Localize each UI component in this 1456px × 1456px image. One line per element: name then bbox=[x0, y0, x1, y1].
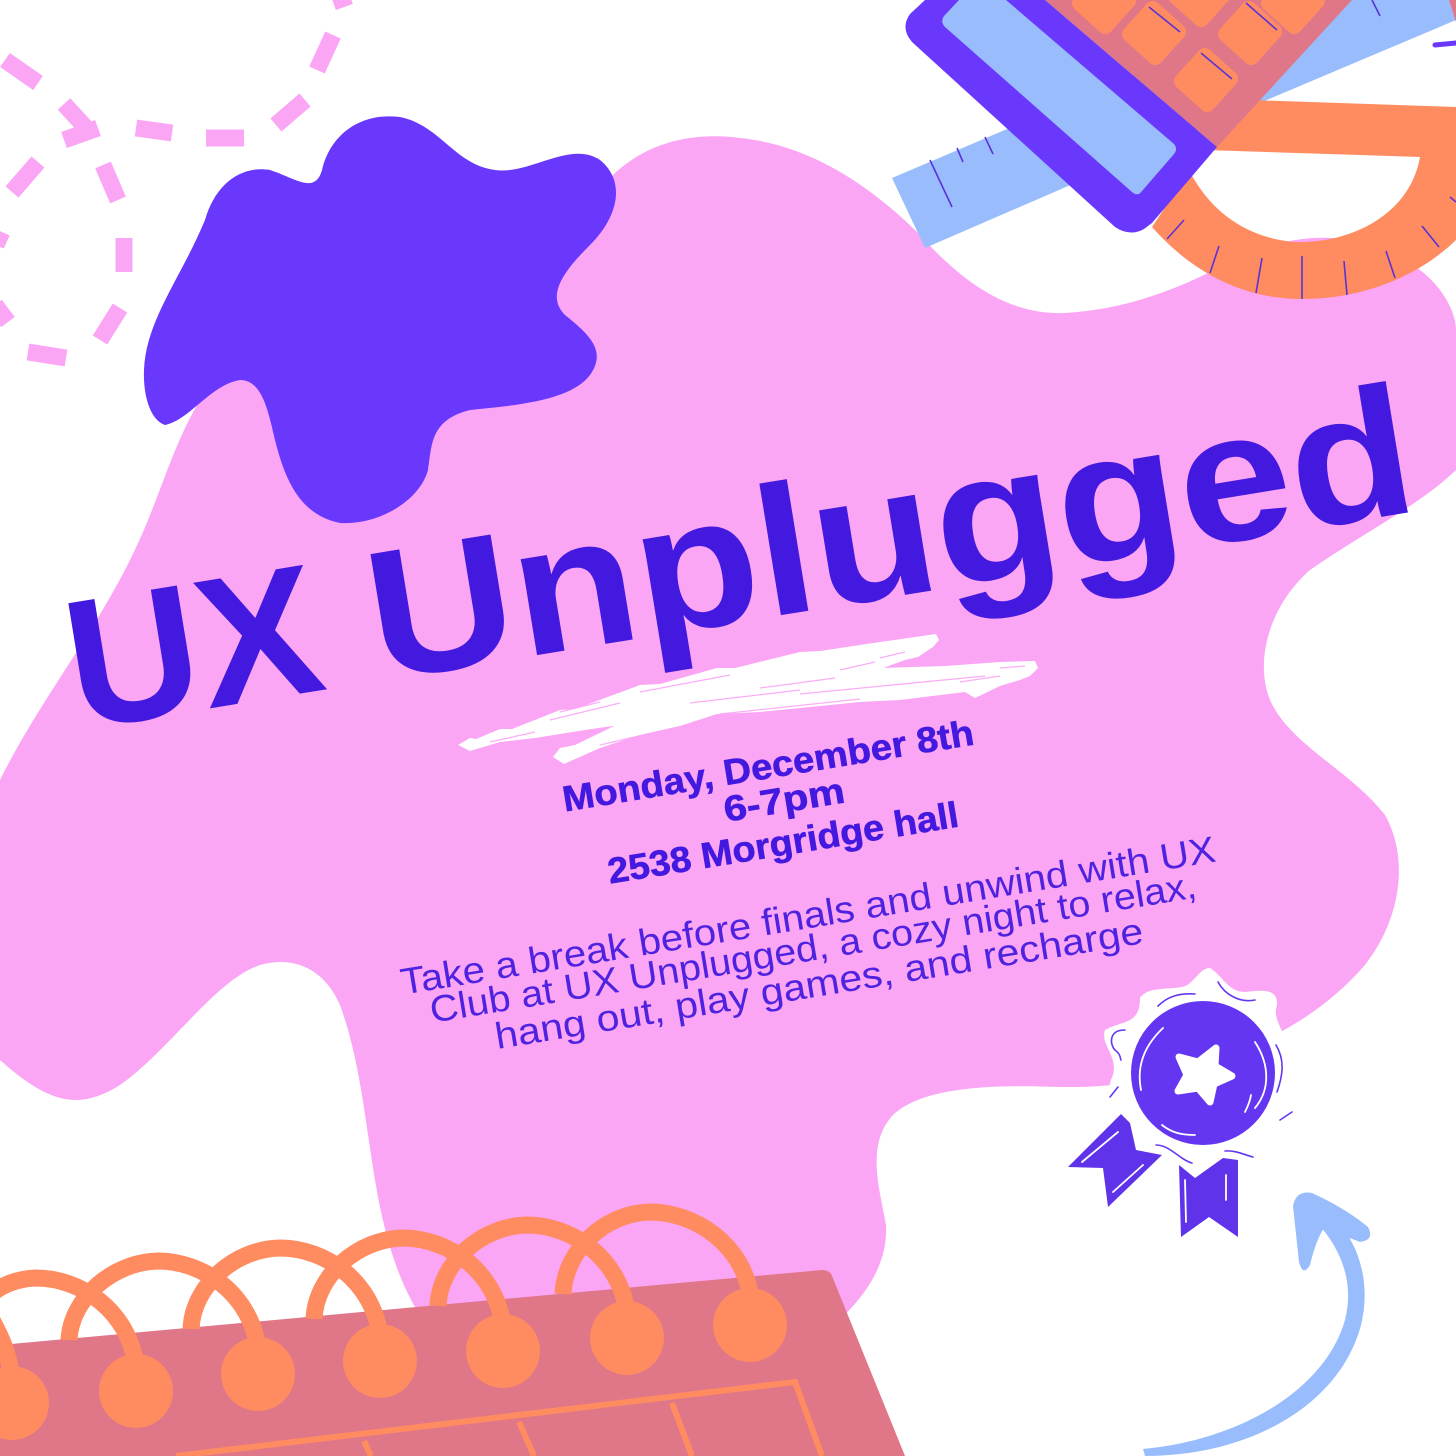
ring eyelets bbox=[0, 1288, 787, 1440]
spiral rings bbox=[0, 1212, 751, 1378]
purple blob bbox=[144, 116, 616, 523]
calculator bbox=[905, 0, 1352, 233]
calculator keys bbox=[1069, 0, 1328, 115]
title: Unplugged bbox=[352, 346, 1427, 719]
description: Take a break before finals and unwind with UX bbox=[398, 829, 1218, 1003]
ribbon tails bbox=[1068, 1114, 1162, 1207]
title bbox=[51, 346, 1427, 768]
event details: 2538 Morgridge hall bbox=[605, 794, 961, 892]
corner accents bbox=[1435, 0, 1456, 45]
description: Club at UX Unplugged, a cozy night to relax, bbox=[427, 865, 1199, 1031]
white brush stroke bbox=[458, 634, 1038, 764]
ruler bbox=[892, 0, 1456, 248]
protractor bbox=[1152, 100, 1456, 299]
highlights bbox=[1082, 1028, 1266, 1222]
dashed pink loops bbox=[0, 0, 350, 358]
notebook grid bbox=[176, 1382, 822, 1456]
star bbox=[1178, 1048, 1232, 1102]
spiral notebook bbox=[0, 1212, 905, 1456]
protractor ticks bbox=[1167, 197, 1456, 299]
medal disc bbox=[1131, 1001, 1275, 1145]
description bbox=[398, 829, 1218, 1057]
event details bbox=[559, 712, 977, 892]
curved arrow bbox=[1143, 1193, 1370, 1456]
event details: Monday, December 8th bbox=[559, 712, 977, 820]
description: hang out, play games, and recharge bbox=[492, 910, 1146, 1057]
award ribbon badge bbox=[1068, 968, 1292, 1237]
event details: 6-7pm bbox=[720, 770, 847, 830]
title: UX bbox=[51, 524, 335, 768]
